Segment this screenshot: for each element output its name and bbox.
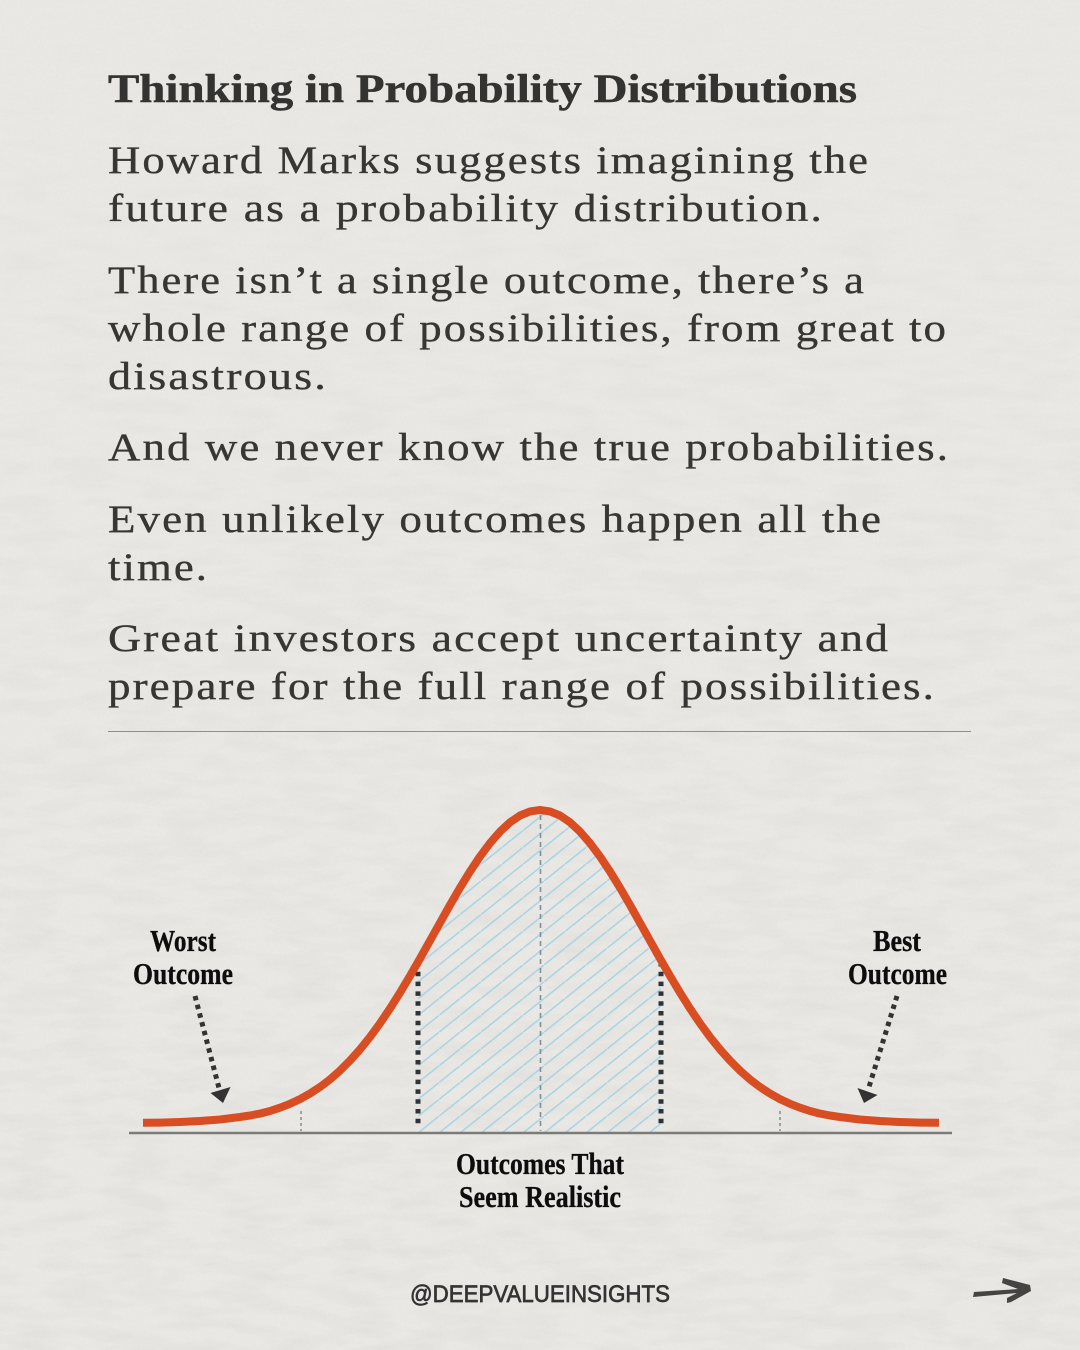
paragraph: range of outcomes: There isn’t a single outcome, there’s a bbox=[108, 259, 866, 302]
hatched realistic region bbox=[418, 810, 661, 1133]
paragraph: Howard Marks: Howard Marks suggests imagining the bbox=[108, 139, 870, 182]
label: best outcome: Best bbox=[873, 923, 922, 958]
tick marks bbox=[301, 1111, 780, 1131]
chart: probability distribution bbox=[129, 810, 952, 1214]
paragraph: great investors: Great investors accept uncertainty and bbox=[108, 617, 890, 660]
label: outcomes that seem realistic: Seem Realistic bbox=[459, 1179, 621, 1214]
paragraph: true probabilities: And we never know the true probabilities. bbox=[108, 426, 950, 469]
arrow: worst outcome bbox=[195, 996, 230, 1103]
paragraph: unlikely outcomes: Even unlikely outcomes happen all the bbox=[108, 498, 883, 541]
paragraph: Howard Marks bbox=[108, 139, 870, 230]
label: outcomes that seem realistic: Outcomes That bbox=[456, 1146, 625, 1181]
icon: next arrow bbox=[973, 1278, 1031, 1303]
paragraph: Howard Marks: future as a probability distribution. bbox=[108, 187, 824, 230]
center dashed line bbox=[540, 815, 542, 1131]
label: outcomes that seem realistic bbox=[456, 1146, 625, 1214]
paragraph: range of outcomes bbox=[108, 259, 948, 398]
text block: body copy bbox=[108, 139, 950, 708]
realistic range boundaries bbox=[418, 962, 661, 1128]
bell curve bbox=[143, 810, 939, 1123]
paragraph: great investors: prepare for the full range of possibilities. bbox=[108, 665, 936, 708]
label: worst outcome: Worst bbox=[150, 923, 217, 958]
paragraph: great investors bbox=[108, 617, 936, 708]
paragraph: range of outcomes: whole range of possibilities, from great to bbox=[108, 307, 948, 350]
arrow: best outcome bbox=[858, 996, 897, 1103]
label: worst outcome bbox=[133, 923, 233, 991]
paragraph: unlikely outcomes bbox=[108, 498, 883, 589]
footer handle: @DEEPVALUEINSIGHTS bbox=[410, 1281, 670, 1308]
label: best outcome bbox=[848, 923, 947, 991]
title: Thinking in Probability Distributions bbox=[108, 66, 857, 111]
axis line bbox=[129, 1132, 952, 1134]
paragraph: range of outcomes: disastrous. bbox=[108, 355, 328, 398]
paragraph: unlikely outcomes: time. bbox=[108, 546, 209, 589]
label: worst outcome: Outcome bbox=[133, 956, 233, 991]
label: best outcome: Outcome bbox=[848, 956, 947, 991]
